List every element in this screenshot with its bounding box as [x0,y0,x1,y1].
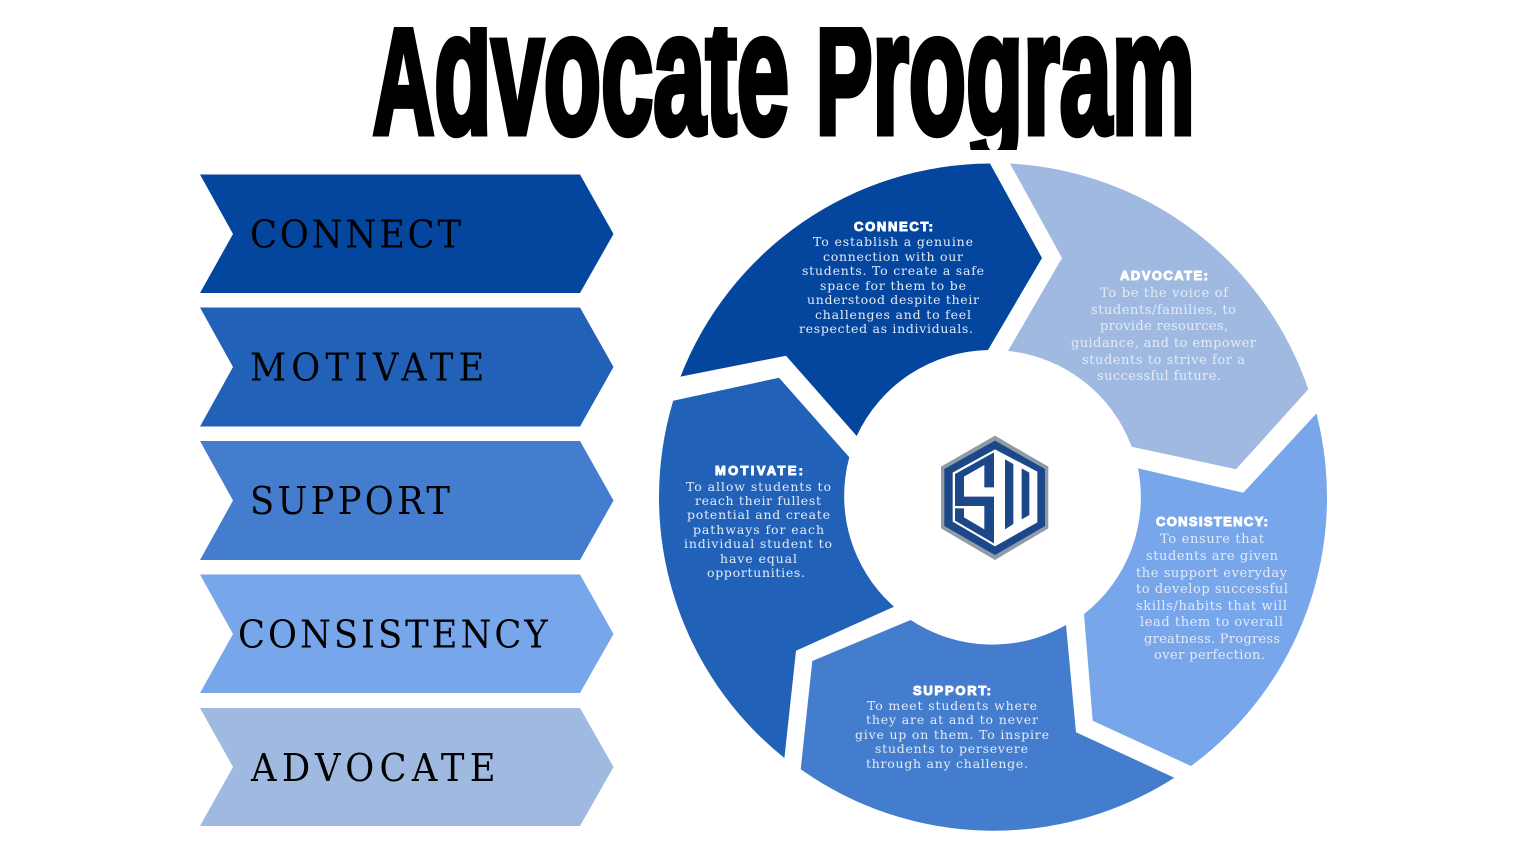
segment: connect: challenges and to feel [815,307,971,322]
segment: connect: space for them to be [820,278,966,293]
segment: advocate [1008,164,1308,469]
segment: consistency: lead them to overall [1140,615,1283,630]
segment: advocate: students/families, to [1091,303,1236,318]
segment: consistency: over perfection. [1154,648,1265,663]
segment: support: To meet students where [867,698,1037,713]
segment: advocate: guidance, and to empower [1071,336,1257,351]
panel: chevron list [200,174,614,826]
segment: motivate: potential and create [687,507,830,522]
segment: motivate: individual student to [684,536,832,551]
chevron: advocate: ADVOCATE [250,746,496,790]
title [372,27,1192,150]
segment: consistency: to develop successful [1136,582,1288,597]
segment: advocate: provide resources, [1100,319,1228,334]
segment: connect: CONNECT: [854,219,933,234]
segment: support [801,620,1174,831]
segment: support: they are at and to never [866,712,1038,727]
chevron: consistency [200,574,614,693]
segment: motivate: MOTIVATE: [715,463,803,478]
segment: motivate [659,378,894,758]
segment: support: give up on them. To inspire [855,727,1049,742]
segment: connect: respected as individuals. [799,321,973,336]
segment: consistency: the support everyday [1136,566,1288,581]
segment: support: SUPPORT: [913,683,991,698]
chevron: support: SUPPORT [250,479,450,523]
chevron: motivate [200,308,614,426]
chevron: motivate: MOTIVATE [250,345,484,390]
segment: consistency: To ensure that [1160,532,1265,547]
segment: advocate: To be the voice of [1100,286,1229,301]
segment: advocate: successful future. [1097,369,1221,384]
chevron: support [200,441,614,560]
chart: cycle wheel [659,164,1327,831]
segment: consistency: CONSISTENCY: [1156,514,1268,529]
segment: consistency [1084,414,1327,766]
segment: consistency: students are given [1146,549,1279,564]
icon: SW hexagon logo [941,436,1048,560]
chevron: connect [200,174,614,293]
chevron: advocate [200,708,614,826]
segment: advocate: ADVOCATE: [1120,268,1208,283]
segment: advocate: students to strive for a [1082,353,1245,368]
segment: motivate: have equal [720,551,797,566]
segment: consistency: greatness. Progress [1144,632,1280,647]
segment: connect: connection with our [823,249,963,264]
segment: motivate: To allow students to [686,479,831,494]
segment: support: through any challenge. [866,756,1028,771]
segment: connect [680,164,1042,436]
segment: consistency: skills/habits that will [1136,599,1287,614]
segment: motivate: reach their fullest [695,493,821,508]
segment: connect: To establish a genuine [813,234,973,249]
segment: connect: students. To create a safe [802,263,984,278]
chevron: connect: CONNECT [250,212,462,257]
segment: motivate: opportunities. [707,565,805,580]
segment: support: students to persevere [875,741,1028,756]
segment: connect: understood despite their [807,292,979,307]
segment: motivate: pathways for each [693,522,824,537]
chevron: consistency: CONSISTENCY [238,612,548,657]
